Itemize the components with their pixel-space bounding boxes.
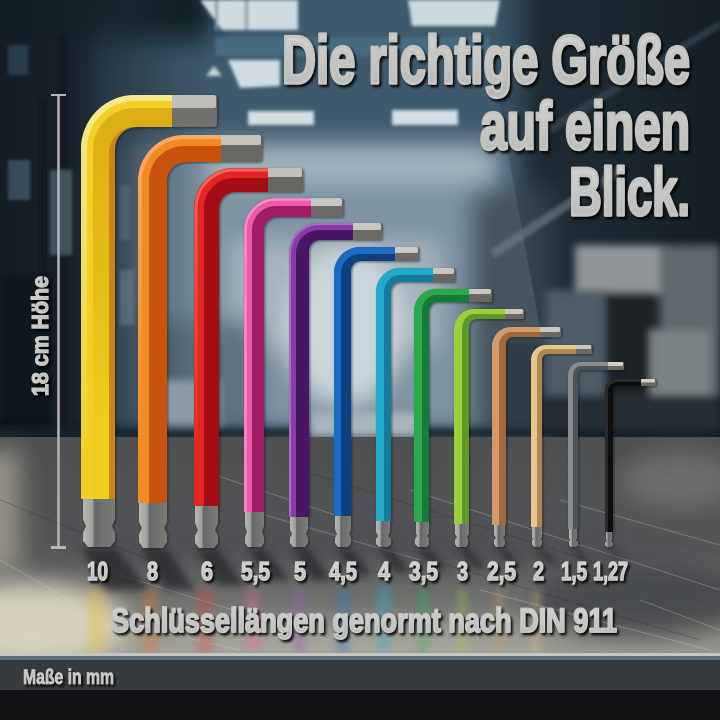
key shadows and colour reflections on table	[82, 548, 628, 655]
label: 18 cm Höhe: 18 cm Höhe	[27, 276, 53, 396]
note: Maße in mm: Maße in mm	[23, 666, 114, 689]
size labels: 1,5	[561, 556, 587, 586]
size labels: 8	[147, 556, 158, 586]
size labels: 10	[87, 556, 108, 586]
size labels: 3	[457, 556, 468, 586]
key 8 mm: orange	[138, 135, 262, 548]
size labels: 5	[294, 556, 306, 586]
metal table surface	[0, 437, 720, 667]
title	[282, 22, 690, 230]
size labels: 2,5	[487, 556, 516, 586]
key 3 mm: lime	[454, 309, 524, 547]
size labels: 2	[533, 556, 544, 586]
key 3,5 mm: green	[414, 289, 492, 547]
key 10 mm: yellow	[81, 95, 217, 547]
height ruler	[51, 94, 66, 549]
size labels: 6	[201, 556, 213, 586]
size labels: 4	[378, 556, 390, 586]
key 6 mm: red	[194, 168, 303, 548]
size labels: 4,5	[329, 556, 357, 586]
key 5,5 mm: pink	[244, 198, 343, 547]
key 2,5 mm: copper	[492, 327, 561, 547]
hex keys set	[81, 95, 656, 548]
size labels	[87, 556, 628, 586]
background: blurred factory hall	[0, 0, 720, 460]
table front edge	[0, 653, 720, 720]
key 4 mm: teal	[376, 268, 455, 547]
key 1,27 mm: black	[605, 379, 656, 547]
size labels: 1,27	[593, 556, 628, 586]
key 2 mm: tan	[531, 345, 592, 547]
key 4,5 mm: blue	[334, 247, 419, 547]
size labels: 5,5	[241, 556, 270, 586]
size labels: 3,5	[409, 556, 438, 586]
key 5 mm: purple	[289, 223, 382, 547]
key 1,5 mm: grey	[568, 362, 624, 547]
